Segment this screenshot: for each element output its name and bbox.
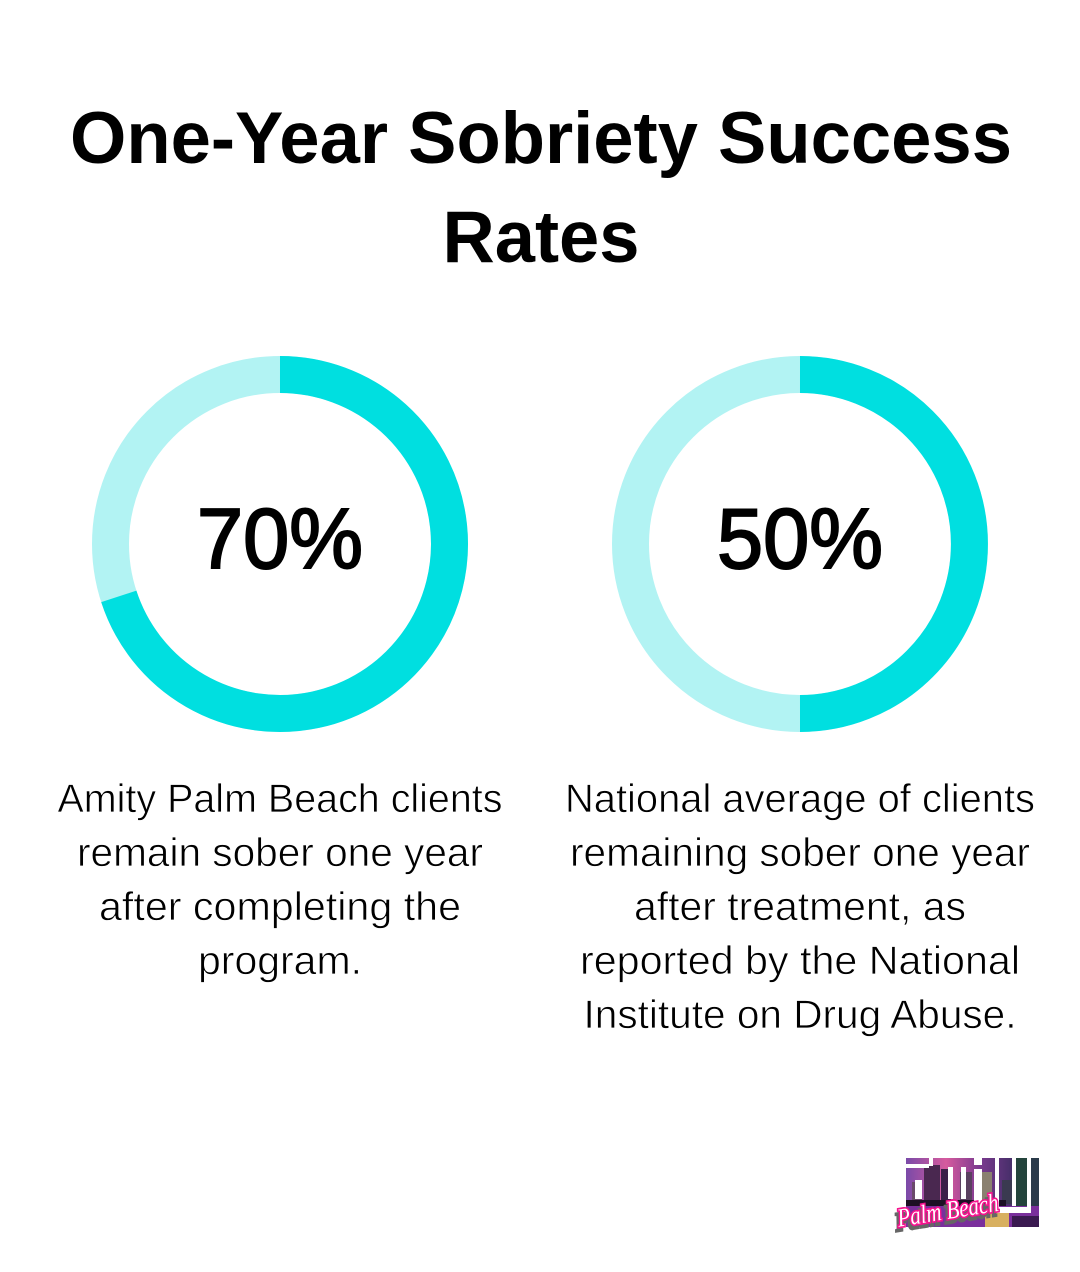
logo script: Palm Beach: Palm Beach — [894, 1188, 1000, 1233]
description: national average — [565, 777, 1035, 1037]
description: national average: remaining sober one year — [570, 831, 1030, 875]
description: Amity Palm Beach: after completing the — [99, 885, 461, 929]
panel: Amity Palm Beach 70% — [58, 374, 502, 983]
logo: Amity Palm Beach — [891, 1157, 1039, 1237]
description: national average: Institute on Drug Abuse. — [584, 993, 1016, 1037]
value: 50%: 50% — [717, 492, 883, 587]
logo script: Palm Beach: Palm Beach — [892, 1192, 998, 1237]
logo letterforms: amity — [906, 1157, 1031, 1213]
description: Amity Palm Beach: remain sober one year — [77, 831, 483, 875]
title: One-Year Sobriety Success — [70, 98, 1012, 179]
value: 70%: 70% — [197, 492, 363, 587]
description: Amity Palm Beach: program. — [198, 939, 362, 983]
panel: National average 50% — [565, 374, 1035, 1037]
title: Rates — [442, 197, 640, 278]
description: Amity Palm Beach: Amity Palm Beach clients — [58, 777, 502, 821]
donut chart: 70% — [110, 374, 450, 714]
description: national average: National average of clients — [565, 777, 1035, 821]
logo photo: city skyline at dusk — [906, 1158, 1039, 1227]
description: national average: after treatment, as — [634, 885, 966, 929]
description: Amity Palm Beach — [58, 777, 502, 983]
description: national average: reported by the National — [580, 939, 1020, 983]
donut chart: 50% — [630, 374, 970, 714]
title — [70, 98, 1012, 278]
